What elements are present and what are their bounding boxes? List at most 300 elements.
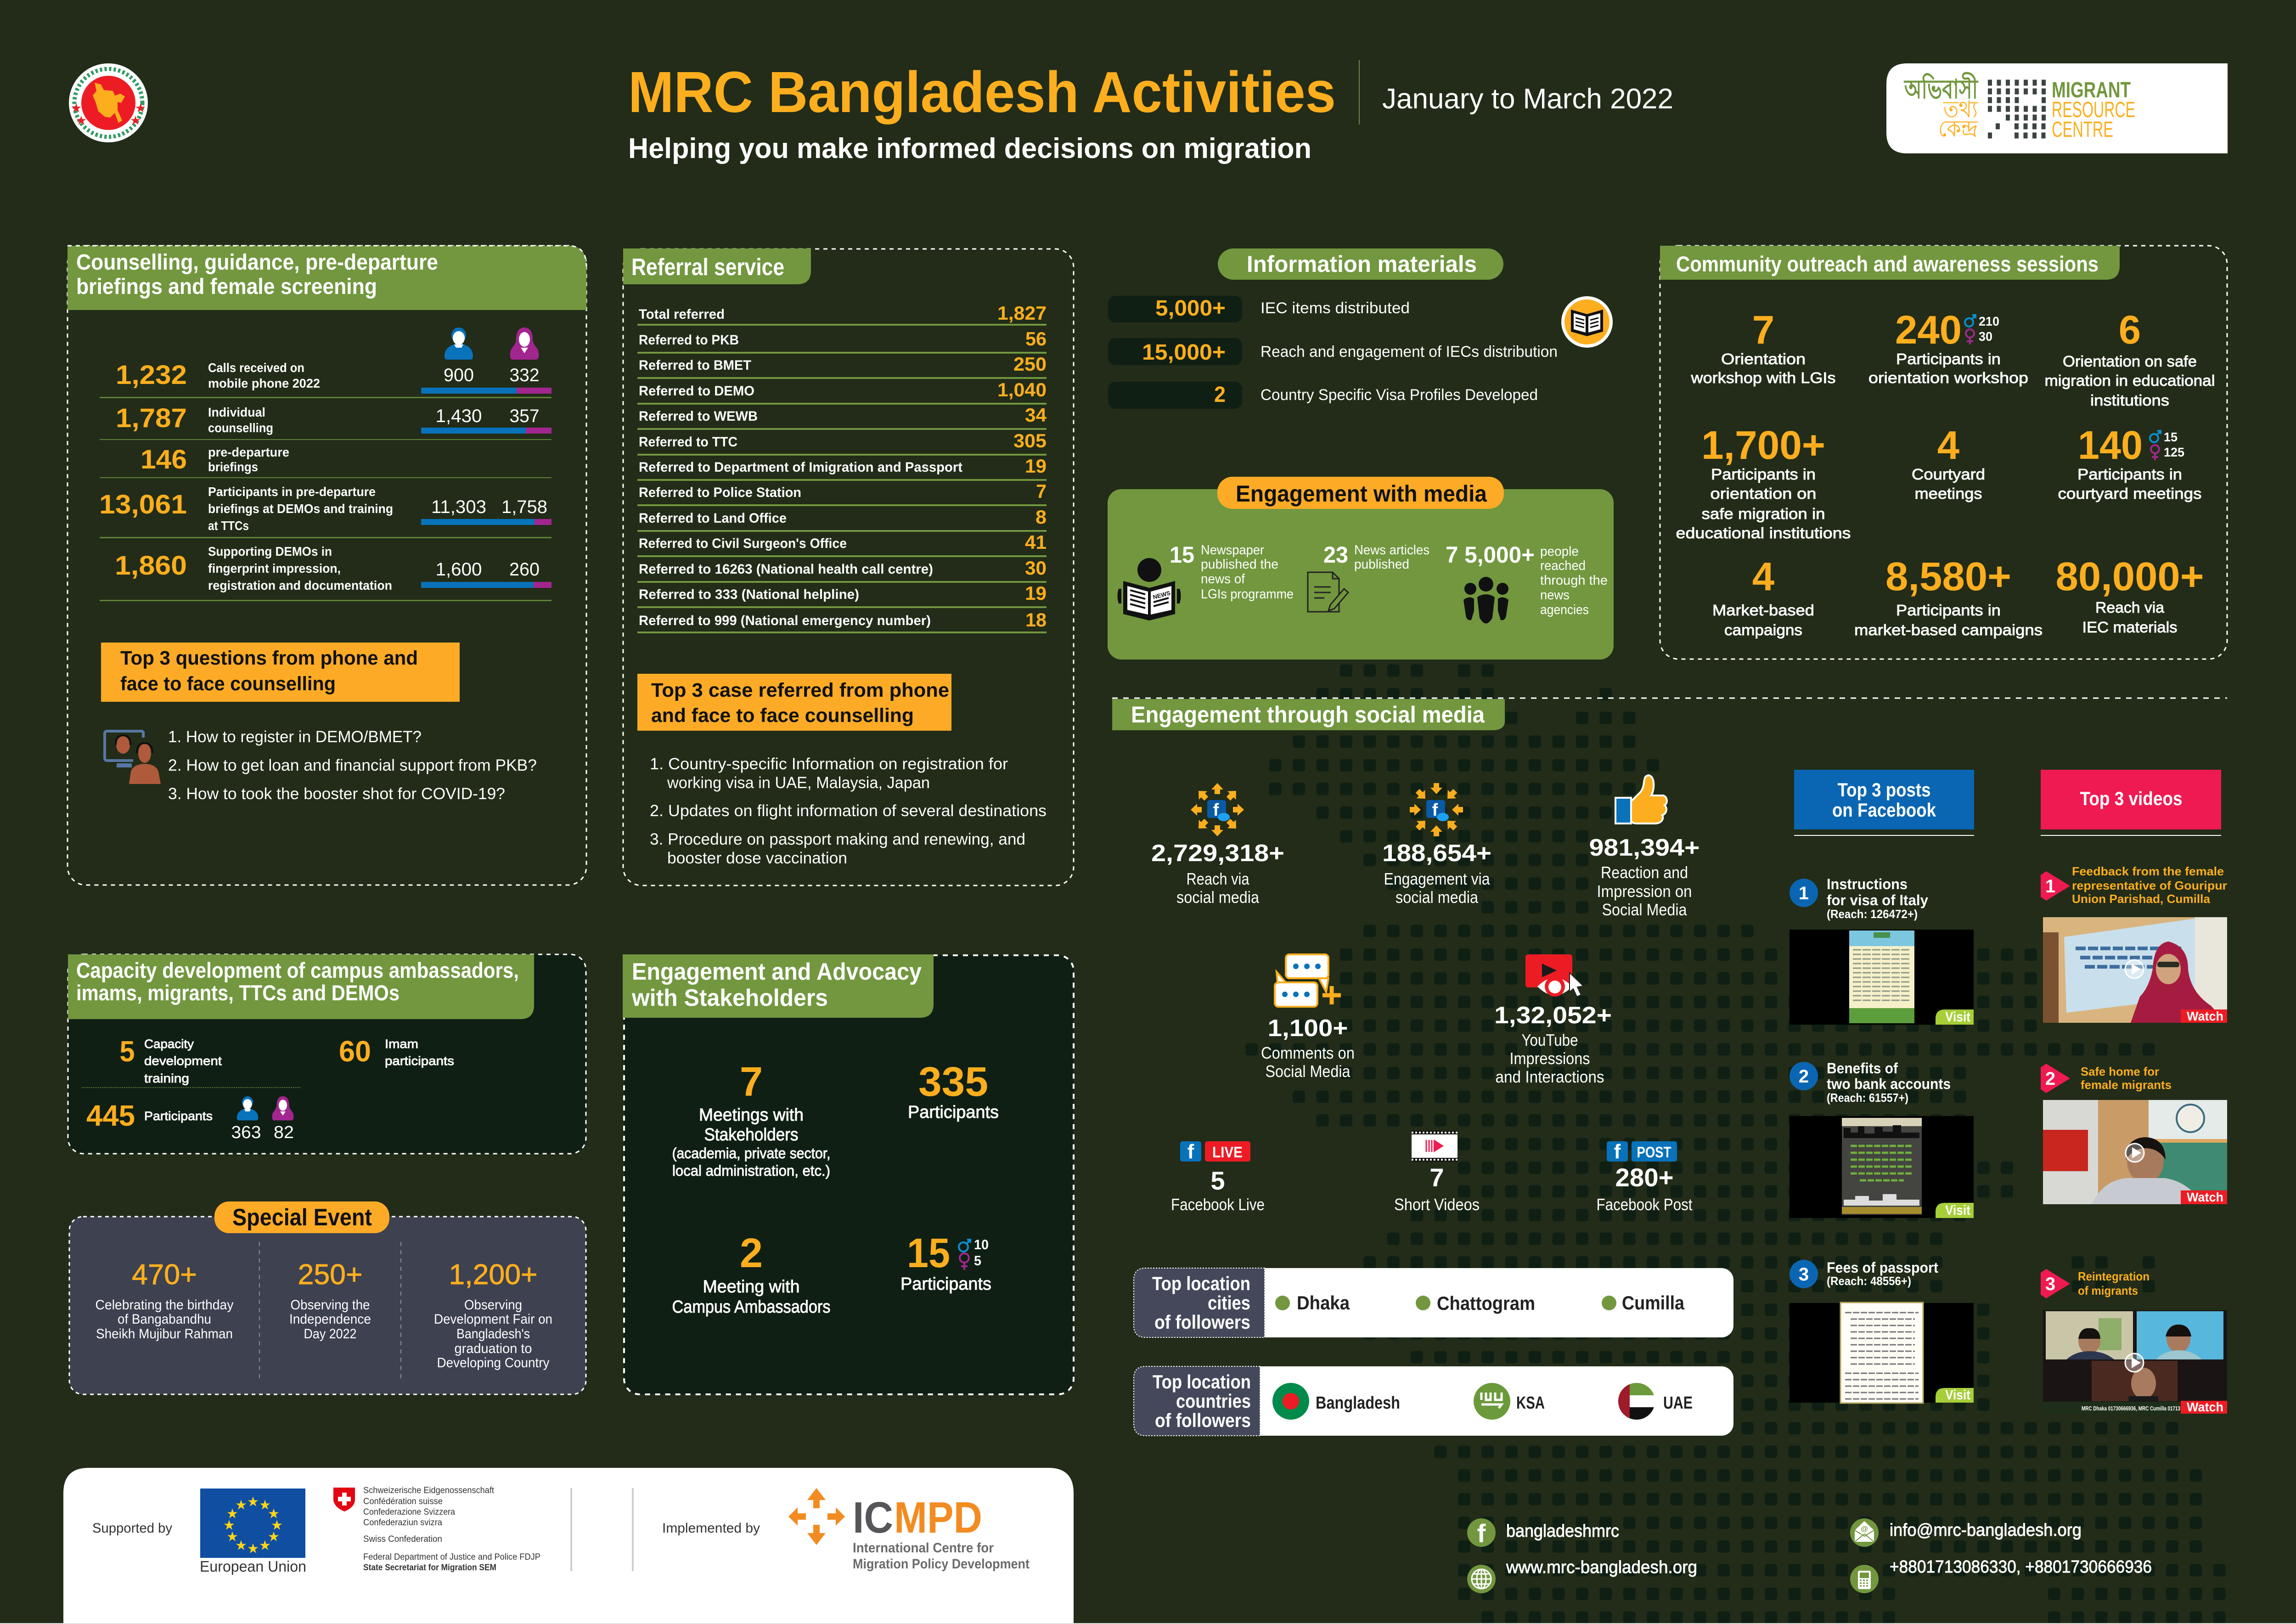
- heading: social media: Engagement through social media: [1131, 702, 1485, 727]
- stat: imam participants: 60: [339, 1035, 371, 1068]
- logo: European Union: ★: [224, 1519, 235, 1532]
- video 3: reintegration of migrants: [2041, 1269, 2227, 1414]
- stat: comments: Comments on: [1261, 1043, 1355, 1062]
- stat: campaign participants: market-based campaigns: [1854, 621, 2043, 638]
- stat: engagement via social media: Engagement via: [1384, 869, 1490, 888]
- post 2: benefits of two bank accounts: 2: [1799, 1066, 1809, 1087]
- stat: courtyard meetings: meetings: [1915, 485, 1982, 502]
- date range: January to March 2022: [1382, 83, 1673, 115]
- video 2: safe home for female migrants: Safe home for: [2081, 1065, 2159, 1078]
- stat: newspapers: 15: [1170, 542, 1194, 568]
- stat: campus ambassador meetings: Meeting with: [703, 1277, 800, 1297]
- heading: counselling: briefings and female screening: [76, 275, 377, 299]
- video 3: reintegration of migrants: 3: [2045, 1274, 2055, 1294]
- row: calls received: 332: [510, 365, 539, 385]
- stat: development fair: Bangladesh's: [456, 1326, 530, 1342]
- post 2: benefits of two bank accounts: two bank accounts: [1827, 1076, 1951, 1092]
- row: individual counselling: Individual: [208, 405, 265, 419]
- icon: Facebook Live badge: f: [1187, 1140, 1194, 1163]
- stat: newspapers: news of: [1201, 572, 1245, 586]
- stat: ambassador participants: Participants: [900, 1274, 991, 1294]
- panel: top location cities of followers: Top location: [1152, 1273, 1250, 1294]
- stat: development fair: graduation to: [455, 1341, 532, 1356]
- row: individual counselling: 357: [510, 406, 539, 426]
- stat: newspapers: Newspaper: [1201, 543, 1264, 558]
- stat: independence day: Day 2022: [304, 1326, 356, 1342]
- icon: comment bubbles: [1275, 954, 1341, 1007]
- video 1: feedback from the female representative: [2041, 864, 2227, 1023]
- stat: orientation workshops: workshop with LGIs: [1690, 369, 1836, 386]
- post 2: benefits of two bank accounts: Benefits of: [1827, 1060, 1898, 1077]
- stat: engagement via social media: [1382, 840, 1491, 907]
- panel: special event: [69, 1201, 586, 1394]
- stat: workshop participants: 210: [1979, 314, 1999, 328]
- row: IEC items: [1108, 296, 1410, 322]
- icon: Bangladesh government emblem: [69, 63, 148, 142]
- icon: booklet: [1561, 296, 1613, 348]
- stat: orientation workshops: [1690, 308, 1836, 386]
- logo: European Union: ★: [268, 1508, 279, 1520]
- stat: courtyard participants: 15: [2164, 430, 2178, 444]
- stat: YouTube impressions: 1,32,052+: [1494, 1002, 1612, 1029]
- row: visa profiles: Country Specific Visa Profiles Developed: [1261, 386, 1538, 404]
- stat: meeting participants: Participants: [908, 1103, 999, 1122]
- stat: safe migration participants: orientation on: [1710, 485, 1817, 502]
- icon: article and pen: [1308, 572, 1348, 612]
- icon: male person: [445, 327, 473, 360]
- icon: thumbs up: [1615, 775, 1667, 823]
- stat: people reached: 7 5,000+: [1446, 542, 1535, 568]
- heading: top 3 posts on Facebook: on Facebook: [1832, 799, 1936, 821]
- post 1: instructions for visa of Italy: Instructions: [1827, 876, 1908, 892]
- logo: ICMPD: IC: [853, 1493, 893, 1542]
- logo: European Union: European Union: [200, 1558, 306, 1575]
- logo: European Union: ★: [271, 1519, 282, 1532]
- stat: training: development: [144, 1054, 222, 1068]
- list: top 3 questions: 3. How to took the booster shot for COVID-19?: [168, 785, 505, 803]
- post 1: instructions for visa of Italy: [1790, 876, 1974, 1025]
- icon: group of people: [1463, 577, 1508, 624]
- stat: meeting participants: [908, 1059, 999, 1122]
- list: top 3 cases: 1. Country-specific Information on registration for: [650, 755, 1008, 773]
- logo: Swiss Confederation: Swiss Confederation: [363, 1534, 442, 1544]
- icon: person reading news: [1118, 558, 1181, 620]
- table: referrals: Total referred: [639, 307, 725, 322]
- stat: market-based campaigns: campaigns: [1724, 621, 1802, 638]
- panel: top location cities of followers: of followers: [1154, 1311, 1250, 1333]
- panel: top location countries of followers: KSA: [1516, 1393, 1545, 1413]
- row: individual counselling: 1,430: [435, 406, 482, 426]
- stat: people reached: through the: [1540, 573, 1608, 588]
- heading: top 3 posts on Facebook: [1794, 770, 1974, 836]
- panel: top location cities of followers: Cumilla: [1622, 1292, 1685, 1314]
- callout: top 3 cases referred: [637, 674, 951, 731]
- heading: capacity development: Capacity development of campus ambassadors,: [76, 958, 519, 982]
- logo: European Union: ★: [248, 1496, 259, 1508]
- stat: training: training: [144, 1071, 189, 1085]
- stat: courtyard meetings: Courtyard: [1912, 466, 1985, 483]
- panel: top location cities of followers: cities: [1208, 1292, 1250, 1314]
- stat: workshop participants: 30: [1979, 329, 1992, 344]
- stat: campus ambassador meetings: Campus Ambassadors: [672, 1297, 830, 1317]
- table: referrals: 34: [1025, 404, 1047, 426]
- stat: courtyard participants: 140: [2078, 423, 2143, 468]
- icon: short video film: [1412, 1131, 1458, 1162]
- video 2: safe home for female migrants: female migrants: [2081, 1078, 2172, 1092]
- stat: news articles: 23: [1323, 542, 1348, 568]
- table: referrals: Referred to PKB: [639, 333, 739, 348]
- list: top 3 cases: 2. Updates on flight information of several destinations: [650, 802, 1047, 820]
- title: MRC Bangladesh Activities: [628, 60, 1336, 124]
- stat: ambassador participants: [900, 1230, 991, 1294]
- stat: birthday celebration: of Bangabandhu: [118, 1312, 211, 1327]
- table: referrals: 56: [1025, 328, 1047, 350]
- stat: reaction and impression: Reaction and: [1601, 863, 1688, 882]
- stat: orientation on safe migration: 6: [2119, 308, 2141, 352]
- post 2: benefits of two bank accounts: [1790, 1060, 1974, 1218]
- logo: Swiss Confederation: State Secretariat for Migration SEM: [363, 1563, 496, 1573]
- row: pre-departure briefings: pre-departure: [208, 445, 289, 459]
- logo: Migrant Resource Centre: RESOURCE: [2052, 98, 2135, 122]
- row: calls received: mobile phone 2022: [208, 376, 320, 390]
- table: referrals: Referred to Department of Imigration and Passport: [639, 460, 962, 475]
- table: referrals: 7: [1036, 480, 1047, 502]
- stat: participants by gender: 363: [231, 1123, 261, 1142]
- stat: participants by gender: 82: [274, 1123, 294, 1142]
- icon: Facebook Post badge: [1607, 1140, 1677, 1163]
- logo: Swiss Confederation: Confederazione Svizzera: [363, 1507, 455, 1517]
- row: supporting DEMOs: 1,860: [115, 551, 187, 581]
- heading: engagement and advocacy: [631, 959, 922, 1011]
- stat: short videos: Short Videos: [1394, 1195, 1480, 1214]
- stat: participants by gender: Participants: [144, 1109, 213, 1123]
- stat: independence day: 250+: [298, 1259, 363, 1291]
- table: referrals: Referred to Land Office: [639, 511, 787, 526]
- icon: Bangladesh government emblem: ★: [71, 102, 81, 114]
- stat: people reached: people: [1540, 544, 1579, 559]
- stat: independence day: [289, 1259, 371, 1342]
- list: top 3 questions: 2. How to get loan and financial support from PKB?: [168, 756, 537, 774]
- stat: reach via social media: [1151, 840, 1284, 907]
- stat: comments: [1261, 1015, 1355, 1081]
- stat: independence day: Observing the: [290, 1297, 370, 1313]
- stat: reaction and impression: Social Media: [1602, 900, 1687, 919]
- stat: people reached: [1446, 542, 1608, 617]
- stat: reach via social media: 2,729,318+: [1151, 840, 1284, 867]
- stat: IEC reach: [2055, 554, 2204, 636]
- stat: news articles: published: [1354, 557, 1409, 572]
- stat: Facebook posts: [1596, 1163, 1693, 1214]
- panel: top location countries of followers: UAE: [1663, 1393, 1693, 1413]
- row: pre-departure briefings: [100, 445, 551, 478]
- heading: engagement and advocacy: with Stakeholders: [631, 985, 828, 1011]
- label: implemented by: Implemented by: [662, 1521, 760, 1536]
- list: top 3 questions: 1. How to register in DEMO/BMET?: [168, 728, 422, 746]
- post 3: fees of passport: 3: [1799, 1264, 1809, 1285]
- stat: YouTube impressions: and Interactions: [1495, 1067, 1604, 1086]
- heading: referral service: Referral service: [631, 254, 784, 281]
- list: top 3 questions: [168, 728, 537, 803]
- row: supporting DEMOs: Supporting DEMOs in: [208, 544, 332, 558]
- stat: newspapers: LGIs programme: [1201, 587, 1294, 602]
- heading: top 3 posts on Facebook: Top 3 posts: [1838, 779, 1930, 801]
- icon: Bangladesh government emblem: ★: [130, 115, 141, 126]
- stat: ambassador participants: 15: [907, 1230, 950, 1276]
- logo: ICMPD: International Centre for: [853, 1540, 994, 1556]
- logo: Swiss Confederation: [333, 1486, 540, 1573]
- icon: engagement burst: f: [1432, 801, 1438, 820]
- post 1: instructions for visa of Italy: Visit: [1945, 1009, 1970, 1025]
- row: pre-departure briefings: briefings: [208, 460, 258, 474]
- icon: Facebook Live badge: [1180, 1140, 1250, 1163]
- stat: IEC reach: 80,000+: [2055, 554, 2204, 599]
- row: individual counselling: 1,787: [116, 403, 187, 433]
- stat: training: Capacity: [144, 1037, 194, 1051]
- panel: information materials: [1108, 248, 1613, 409]
- stat: courtyard meetings: [1912, 423, 1985, 502]
- stat: engagement via social media: social media: [1396, 888, 1479, 907]
- row: IEC items: 5,000+: [1155, 296, 1226, 321]
- panel: top location countries of followers: [1134, 1366, 1733, 1436]
- table: referrals: Referred to DEMO: [639, 383, 754, 399]
- stat: campaign participants: [1854, 554, 2043, 638]
- icon: engagement burst: [1410, 783, 1463, 836]
- stat: development fair: Development Fair on: [434, 1312, 552, 1327]
- row: pre-departure briefings: 146: [141, 445, 187, 474]
- divider: title and date: [1359, 60, 1360, 124]
- heading: counselling: [76, 250, 438, 299]
- video 1: feedback from the female representative: 1: [2045, 876, 2055, 897]
- logo: Migrant Resource Centre: অভিবাসী: [1904, 72, 1979, 104]
- label: supported by: Supported by: [92, 1521, 172, 1536]
- stat: people reached: news: [1540, 588, 1570, 603]
- stat: meeting participants: 335: [918, 1059, 988, 1105]
- logo: European Union: ★: [227, 1531, 238, 1543]
- stat: development fair: Developing Country: [437, 1355, 549, 1370]
- icon: Facebook Post badge: f: [1614, 1140, 1621, 1163]
- logo: Migrant Resource Centre: কেন্দ্র: [1938, 116, 1978, 141]
- logo: European Union: [200, 1489, 306, 1575]
- logo: European Union: ★: [236, 1499, 247, 1511]
- icon: YouTube impression: [1525, 954, 1583, 997]
- row: participants in briefings: briefings at DEMOs and training: [208, 502, 393, 516]
- row: reach and engagement: 15,000+: [1142, 340, 1226, 365]
- table: referrals: Referred to TTC: [639, 434, 737, 450]
- stat: campaign participants: Participants in: [1896, 602, 2001, 619]
- stat: stakeholder meetings: (academia, private sector,: [672, 1145, 830, 1162]
- stat: ambassador participants: 5: [974, 1253, 981, 1269]
- stat: orientation on safe migration: institutions: [2090, 392, 2169, 409]
- table: referrals: [637, 302, 1047, 633]
- heading: counselling: Counselling, guidance, pre-departure: [76, 250, 438, 275]
- video 3: reintegration of migrants: Reintegration: [2078, 1269, 2150, 1283]
- stat: safe migration participants: 1,700+: [1701, 423, 1825, 468]
- heading: engagement and advocacy: Engagement and Advocacy: [632, 959, 922, 985]
- contact: email: [1850, 1518, 2082, 1547]
- table: referrals: 8: [1035, 506, 1047, 528]
- row: participants in briefings: [99, 485, 551, 538]
- panel: top location cities of followers: Chattogram: [1437, 1292, 1535, 1314]
- stat: Facebook Live: 5: [1210, 1166, 1225, 1195]
- video 3: reintegration of migrants: MRC Dhaka 01730666936, MRC Cumilla 01713: [2082, 1405, 2180, 1412]
- stat: market-based campaigns: Market-based: [1712, 602, 1814, 619]
- stat: campus ambassador meetings: [672, 1230, 830, 1317]
- callout: top 3 cases referred: and face to face counselling: [651, 705, 914, 727]
- list: top 3 cases: 3. Procedure on passport making and renewing, and: [650, 830, 1025, 848]
- stat: safe migration participants: educational institutions: [1676, 524, 1851, 541]
- video 3: reintegration of migrants: Watch: [2187, 1400, 2223, 1414]
- callout: top 3 questions: face to face counselling: [120, 673, 336, 695]
- icon: Facebook Live badge: LIVE: [1212, 1144, 1243, 1161]
- stat: reaction and impression: [1589, 835, 1700, 919]
- table: referrals: Referred to WEWB: [639, 409, 758, 424]
- stat: reaction and impression: 981,394+: [1589, 835, 1700, 861]
- post 3: fees of passport: Fees of passport: [1827, 1259, 1938, 1276]
- row: calls received: 1,232: [116, 360, 187, 390]
- stat: training: [119, 1035, 222, 1085]
- table: referrals: 19: [1025, 582, 1047, 604]
- icon: female person: [510, 327, 539, 360]
- row: participants in briefings: Participants in pre-departure: [208, 485, 376, 499]
- stat: YouTube impressions: Impressions: [1510, 1049, 1590, 1068]
- stat: ambassador participants: 10: [974, 1237, 989, 1252]
- stat: YouTube impressions: YouTube: [1522, 1031, 1578, 1049]
- stat: reach via social media: Reach via: [1187, 869, 1249, 888]
- post 1: instructions for visa of Italy: for visa of Italy: [1827, 892, 1928, 908]
- contact: website: [1467, 1558, 1697, 1593]
- row: calls received: [100, 360, 551, 398]
- row: participants in briefings: 11,303: [431, 497, 486, 517]
- stat: short videos: 7: [1429, 1163, 1444, 1192]
- stat: development fair: [434, 1259, 552, 1370]
- stat: people reached: agencies: [1540, 603, 1589, 617]
- table: referrals: Referred to 999 (National emergency number): [639, 613, 931, 628]
- stat: imam participants: participants: [385, 1054, 454, 1068]
- stat: safe migration participants: [1676, 423, 1851, 541]
- logo: ICMPD: [788, 1488, 1030, 1572]
- table: referrals: 305: [1013, 430, 1047, 451]
- stat: birthday celebration: [96, 1259, 233, 1342]
- table: referrals: Referred to BMET: [639, 358, 751, 373]
- table: referrals: 1,827: [997, 302, 1047, 324]
- video 1: feedback from the female representative: Watch: [2187, 1009, 2223, 1023]
- table: referrals: 41: [1025, 531, 1047, 553]
- stat: YouTube impressions: [1494, 1002, 1612, 1086]
- post 3: fees of passport: [1790, 1259, 1974, 1403]
- logo: Swiss Confederation: Schweizerische Eidgenossenschaft: [363, 1486, 495, 1495]
- post 3: fees of passport: Visit: [1945, 1387, 1970, 1403]
- heading: top 3 videos: Top 3 videos: [2080, 788, 2182, 809]
- icon: Facebook Post badge: POST: [1637, 1144, 1671, 1161]
- callout: top 3 cases referred: Top 3 case referred from phone: [651, 679, 949, 701]
- stat: participants by gender: [86, 1096, 294, 1142]
- panel: referral service: [623, 248, 1074, 885]
- icon: video call counsellor: [105, 731, 161, 784]
- logo: European Union: ★: [248, 1543, 259, 1555]
- stat: Facebook posts: 280+: [1615, 1163, 1673, 1192]
- stat: development fair: Observing: [464, 1297, 522, 1313]
- logo: ICMPD: Migration Policy Development: [853, 1556, 1030, 1572]
- section: engagement through social media: [1112, 698, 2227, 730]
- panel: top location countries of followers: of followers: [1155, 1410, 1251, 1431]
- stat: imam participants: [339, 1035, 454, 1068]
- stat: birthday celebration: Sheikh Mujibur Rahman: [96, 1326, 233, 1342]
- stat: IEC reach: Reach via: [2095, 599, 2165, 616]
- panel: top location countries of followers: countries: [1176, 1390, 1251, 1412]
- stat: people reached: reached: [1540, 558, 1586, 573]
- logo: European Union: ★: [268, 1531, 279, 1543]
- stat: campaign participants: 8,580+: [1885, 554, 2011, 599]
- icon: reach burst: f: [1213, 801, 1219, 820]
- row: supporting DEMOs: 1,600: [435, 559, 482, 580]
- stat: courtyard participants: 125: [2164, 445, 2184, 459]
- heading: information materials: [1218, 248, 1503, 280]
- table: referrals: Referred to Civil Surgeon's Office: [639, 536, 847, 551]
- row: reach and engagement: [1108, 338, 1558, 365]
- stat: reaction and impression: Impression on: [1597, 882, 1692, 901]
- contact: Facebook: f: [1477, 1519, 1486, 1548]
- panel: capacity development: [68, 954, 586, 1154]
- row: participants in briefings: 1,758: [501, 497, 547, 517]
- row: supporting DEMOs: 260: [509, 559, 540, 580]
- row: participants in briefings: 13,061: [99, 490, 187, 519]
- row: visa profiles: 2: [1214, 383, 1226, 407]
- table: referrals: 18: [1025, 609, 1047, 631]
- post 1: instructions for visa of Italy: 1: [1799, 883, 1809, 903]
- stat: stakeholder meetings: Stakeholders: [704, 1125, 798, 1145]
- stat: courtyard participants: [2058, 423, 2201, 502]
- stat: reach via social media: social media: [1176, 888, 1260, 907]
- logo: European Union: ★: [259, 1539, 270, 1552]
- heading: information materials: Information materials: [1247, 251, 1477, 277]
- stat: campus ambassador meetings: 2: [740, 1230, 763, 1276]
- post 2: benefits of two bank accounts: Visit: [1945, 1203, 1970, 1218]
- stat: workshop participants: orientation workshop: [1868, 369, 2028, 386]
- subtitle: Helping you make informed decisions on migration: [628, 133, 1311, 164]
- stat: newspapers: [1170, 542, 1294, 602]
- panel: top location cities of followers: [1134, 1268, 1733, 1337]
- table: referrals: Referred to 333 (National helpline): [639, 587, 859, 602]
- video 1: feedback from the female representative: Feedback from the female: [2072, 864, 2224, 878]
- heading: community outreach: Community outreach and awareness sessions: [1676, 252, 2099, 276]
- stat: IEC reach: IEC materials: [2082, 619, 2178, 636]
- contact: phone: [1850, 1557, 2152, 1593]
- logo: Migrant Resource Centre: [1886, 63, 2228, 153]
- stat: imam participants: Imam: [385, 1037, 418, 1051]
- video 3: reintegration of migrants: of migrants: [2078, 1284, 2138, 1297]
- contact: Facebook: [1467, 1518, 1619, 1548]
- stat: courtyard meetings: 4: [1937, 423, 1959, 468]
- icon: Saudi Arabia flag: [1474, 1383, 1510, 1420]
- panel: top location countries of followers: Bangladesh: [1316, 1393, 1400, 1413]
- contact: email: @: [1861, 1525, 1868, 1533]
- icon: UAE flag: [1618, 1383, 1655, 1420]
- panel: engagement and advocacy with stakeholders: [623, 954, 1074, 1394]
- stat: orientation on safe migration: Orientation on safe: [2063, 353, 2197, 370]
- logo: European Union: ★: [236, 1539, 247, 1552]
- stat: participants by gender: 445: [86, 1099, 135, 1132]
- video 1: feedback from the female representative: representative of Gouripur: [2072, 879, 2227, 892]
- row: reach and engagement: Reach and engagement of IECs distribution: [1261, 343, 1558, 361]
- panel: top location countries of followers: Top location: [1153, 1371, 1251, 1393]
- stat: Facebook Live: [1171, 1166, 1265, 1214]
- logo: Migrant Resource Centre: CENTRE: [2052, 118, 2113, 142]
- logo: Swiss Confederation: Federal Department of Justice and Police FDJP: [363, 1552, 540, 1562]
- stat: Facebook Live: Facebook Live: [1171, 1195, 1265, 1214]
- stat: independence day: Independence: [289, 1312, 371, 1327]
- icon: reach burst: [1191, 783, 1244, 836]
- contact: email: info@mrc-bangladesh.org: [1890, 1521, 2082, 1540]
